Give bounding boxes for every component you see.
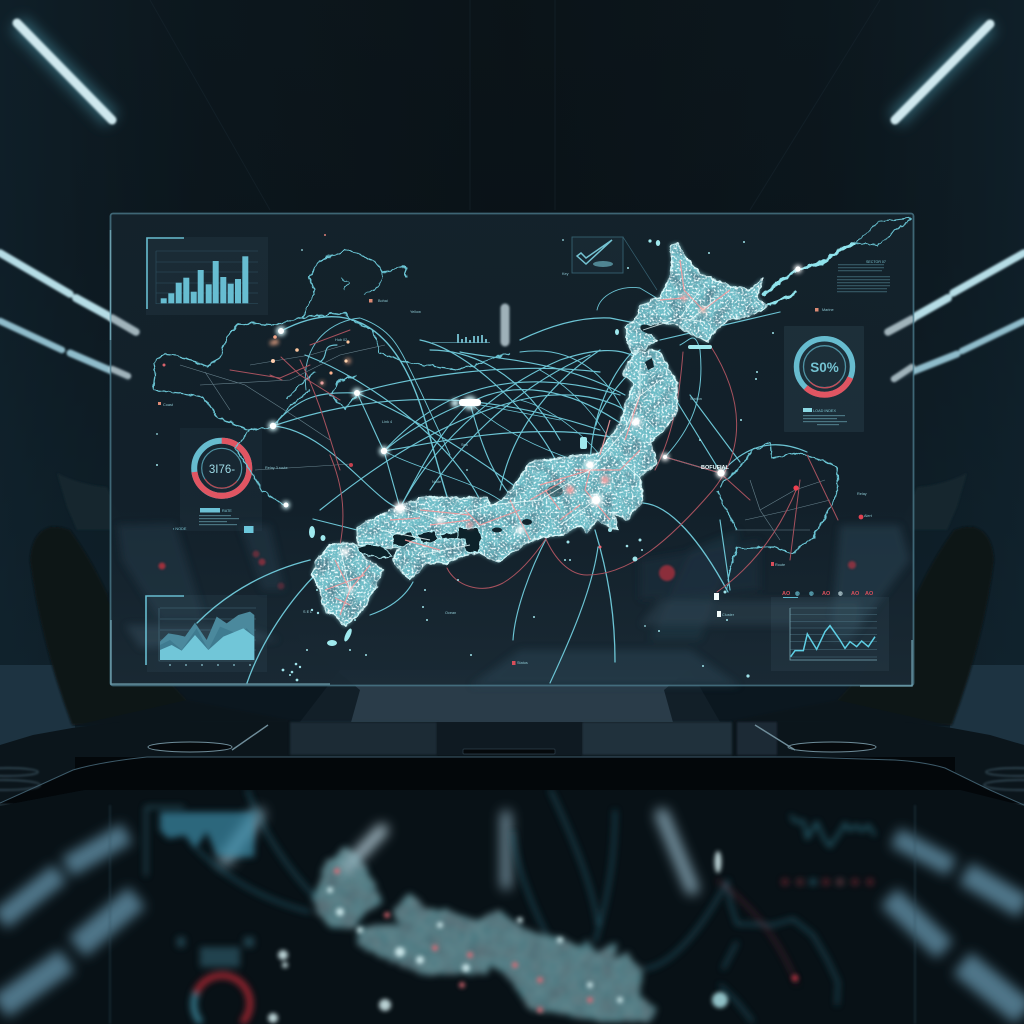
table: left cup holder xyxy=(148,725,268,752)
map: place labels: Station xyxy=(690,397,702,401)
panel: line chart: AO xyxy=(851,591,860,597)
ceiling light: top right xyxy=(895,24,990,120)
panel: line chart: ◍ xyxy=(795,591,801,597)
chair: left xyxy=(30,473,360,726)
reflected red arcs xyxy=(717,880,797,984)
map: place labels: Coast xyxy=(163,403,174,407)
reflected lights on screen xyxy=(112,308,912,379)
map: place labels: Node xyxy=(432,480,441,484)
table: right cup holder xyxy=(755,725,876,752)
map: place labels: BOFUFIAL xyxy=(701,465,729,471)
map: place labels: Link 4 xyxy=(382,420,392,424)
mirror: reflected frame xyxy=(110,805,915,1024)
ceiling light: top left xyxy=(17,23,112,120)
panel: left gauge xyxy=(173,428,262,533)
map: place labels: Ocean xyxy=(445,611,456,615)
reflected panel blocks xyxy=(177,937,254,967)
table: side controls xyxy=(0,768,1024,819)
panel: right gauge: S0% xyxy=(810,360,839,375)
reflected gauge xyxy=(194,975,250,1023)
map: marker squares xyxy=(158,299,818,665)
map: red connection arcs xyxy=(230,330,838,592)
map: bays xyxy=(492,323,655,532)
reflected Japan xyxy=(312,845,657,1022)
panel: bar chart xyxy=(146,237,268,315)
map: bright nodes xyxy=(162,266,863,617)
map: place labels: Alert xyxy=(864,514,873,518)
map: place labels: Cluster xyxy=(722,613,735,617)
map: inland sea xyxy=(358,528,481,558)
map: place labels: Route xyxy=(775,563,785,567)
table mirror surface xyxy=(0,790,1024,1024)
panel: line chart: AO xyxy=(865,591,874,597)
panel: left gauge: 3I76- xyxy=(209,464,235,476)
reflected arcs xyxy=(197,789,838,1022)
table: front black edge xyxy=(0,757,1024,806)
map: scattered dots xyxy=(156,234,774,681)
mirror: reflected side lights xyxy=(0,833,1024,1013)
panel: line chart xyxy=(771,591,889,671)
table: lit edge line xyxy=(0,757,1024,805)
panel: right gauge: LOAD INDEX xyxy=(813,409,836,413)
panel: line chart: ◍ xyxy=(838,591,844,597)
display screen xyxy=(110,214,914,686)
reflected area chart xyxy=(160,812,254,857)
panel: left gauge: RATE xyxy=(222,509,232,513)
mirror: reflected ceiling lights xyxy=(225,815,692,888)
chair: right xyxy=(664,473,994,726)
map: mainland outlines xyxy=(153,218,912,590)
map: place labels: Sea xyxy=(461,443,469,447)
seen-through chair lamps xyxy=(158,550,856,590)
map: Japan islands glow xyxy=(312,243,767,627)
map: red land routes xyxy=(325,260,730,615)
map: Japan islands xyxy=(312,243,767,627)
panel: right gauge xyxy=(784,326,864,432)
frame highlights xyxy=(110,230,912,686)
map: small islands xyxy=(309,239,712,646)
mini bar indicator xyxy=(432,334,490,343)
map: place labels: Relay xyxy=(857,492,867,496)
panel: line chart: AO xyxy=(822,591,831,597)
map: place labels: Status xyxy=(517,661,528,665)
map: Kamchatka chain xyxy=(762,243,855,308)
seen-through chairs xyxy=(117,523,910,686)
mirror: warm and bright reflected spots xyxy=(268,851,798,1023)
map: white land routes xyxy=(340,290,715,590)
map: place labels: Marine xyxy=(822,308,834,312)
mirror: reflected display xyxy=(146,789,875,1023)
screen glass xyxy=(110,214,914,686)
table: back surface xyxy=(0,722,1024,810)
map: place labels: Relay 3 route xyxy=(265,466,288,470)
panel: area chart xyxy=(146,595,267,672)
screen frame xyxy=(110,214,914,686)
map: coloured nodes glow xyxy=(268,265,802,593)
map: place labels xyxy=(163,272,873,665)
map: place labels: Key xyxy=(562,272,569,276)
wall lights: right xyxy=(888,253,1024,379)
text block: top right notes xyxy=(837,260,890,292)
map: cyan connection arcs xyxy=(197,287,807,683)
table: band fill xyxy=(75,757,955,790)
map: place labels: Yellow xyxy=(410,310,421,314)
map: inner route details xyxy=(180,345,830,540)
panel: line chart: AO xyxy=(782,591,791,597)
panel: left gauge: ▪ NODE xyxy=(173,527,187,531)
map: place labels: Hub 02 xyxy=(335,338,347,342)
wall lights: left xyxy=(0,253,136,378)
reflected chart legend xyxy=(782,879,873,885)
table: centre slot xyxy=(463,749,555,754)
reflected corner line xyxy=(146,807,184,876)
panel: line chart: ◍ xyxy=(809,591,815,597)
icon: checkmark panel xyxy=(572,237,657,290)
map: place labels: S E L xyxy=(303,610,312,614)
background: floor xyxy=(0,665,1024,745)
reflected line chart xyxy=(791,815,875,846)
text block: top right notes: SECTOR 07 xyxy=(866,260,886,264)
map: place labels: Bohai xyxy=(378,299,388,303)
